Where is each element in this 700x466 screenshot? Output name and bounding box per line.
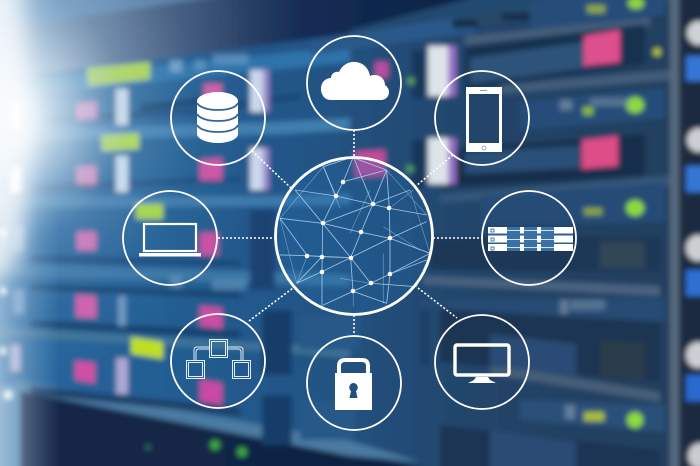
foreground: hub, connectors and icons bbox=[123, 36, 576, 430]
dotted connectors hub to icons bbox=[218, 130, 482, 336]
rack edge bbox=[670, 0, 679, 466]
icon: smartphone bbox=[435, 71, 529, 165]
icon: padlock bbox=[307, 336, 401, 430]
right rows: dark drive bays bbox=[465, 24, 645, 90]
silver knobs bbox=[687, 21, 700, 45]
left light glow bbox=[0, 0, 290, 466]
icon: cloud bbox=[307, 36, 401, 130]
pink drive tabs bbox=[584, 30, 620, 66]
dark bottom wedge bbox=[20, 388, 470, 466]
white/purple bars bbox=[116, 89, 128, 125]
dark verticals bbox=[412, 50, 426, 98]
lime labels bbox=[87, 62, 150, 86]
right rows: front panels bbox=[350, 0, 700, 45]
mesh nodes bbox=[305, 180, 392, 293]
icon: database bbox=[171, 71, 265, 165]
mesh lines bbox=[280, 157, 430, 310]
dark top wedge bbox=[0, 0, 510, 78]
icon: desktop monitor bbox=[435, 315, 529, 409]
central hub: polygon network globe bbox=[275, 157, 433, 315]
server row bands: left bbox=[0, 46, 350, 98]
icon: laptop bbox=[123, 191, 217, 285]
tray dark slots left bbox=[30, 92, 300, 124]
panel text smudges bbox=[170, 60, 182, 72]
icon: server rack bbox=[482, 191, 576, 285]
icon: network hierarchy bbox=[171, 314, 265, 408]
right rows: grey separators bbox=[465, 18, 650, 46]
blue squares bbox=[686, 56, 700, 81]
green LEDs bbox=[628, 0, 644, 9]
right rows: LED panels bbox=[480, 183, 665, 226]
